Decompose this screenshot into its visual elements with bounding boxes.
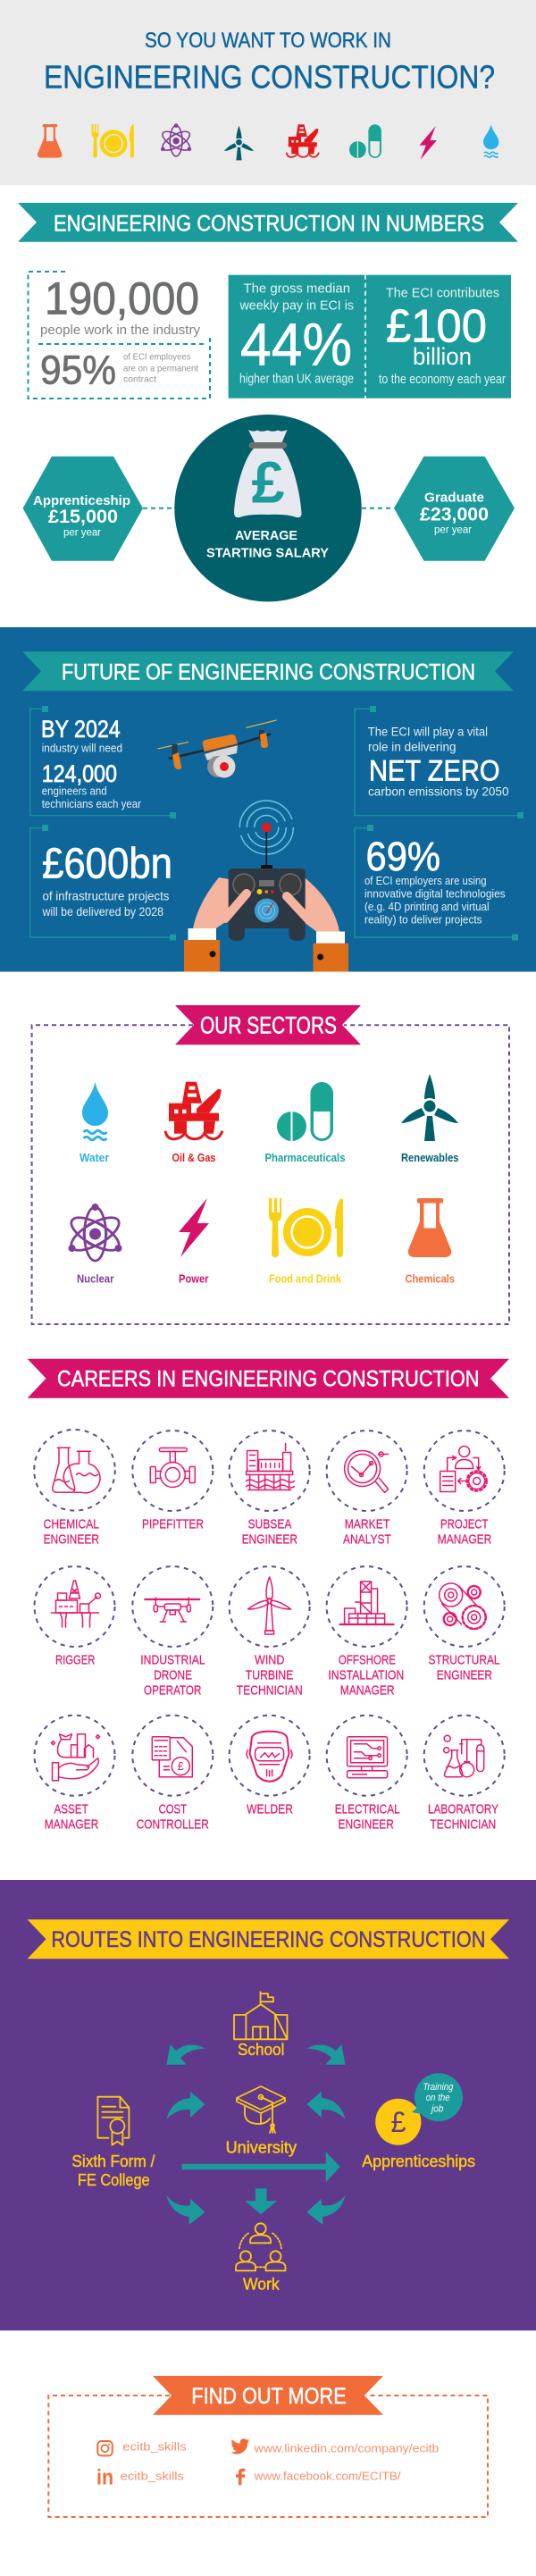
career: offshore installation manager: MANAGER xyxy=(340,1683,395,1699)
hexagon: graduate salary: per year xyxy=(434,525,472,536)
pay text: weekly pay in ECI is xyxy=(239,298,354,314)
sector: pharmaceuticals xyxy=(264,1082,346,1164)
sector: oil and gas xyxy=(165,1082,222,1164)
apprenticeships label: Apprenticeships xyxy=(362,2152,475,2170)
banner: routes heading xyxy=(28,1919,509,1959)
pay text: higher than UK average xyxy=(239,372,354,387)
icon: oil rig xyxy=(287,124,319,157)
bubble: training on the job: job xyxy=(430,2103,443,2114)
icon: nuclear atom xyxy=(160,123,192,156)
text: by 2024: technicians each year xyxy=(42,797,142,810)
sector: nuclear xyxy=(67,1204,123,1286)
hexagon: apprenticeship salary: £15,000 xyxy=(48,507,118,527)
salary label xyxy=(206,528,329,561)
teal stat panel xyxy=(229,275,511,399)
route: sixth form: Sixth Form / xyxy=(71,2152,155,2170)
route: school xyxy=(234,1992,288,2059)
career: industrial drone operator: DRONE xyxy=(154,1668,192,1683)
text: £600bn: of infrastructure projects xyxy=(43,888,169,902)
stat: 190,000: 190,000 xyxy=(45,273,199,324)
arrow: school to apprenticeships xyxy=(306,2044,346,2065)
hexagon: apprenticeship salary: per year xyxy=(63,527,101,538)
career: wind turbine technician: WIND xyxy=(255,1653,285,1668)
salary connectors xyxy=(143,508,394,509)
sector: renewables xyxy=(401,1074,459,1164)
icon: money bag: £ xyxy=(252,449,285,515)
career: wind turbine technician: TECHNICIAN xyxy=(237,1683,303,1699)
panel: future of engineering construction xyxy=(0,627,536,972)
dashed stat box xyxy=(29,272,210,399)
illustration: drone xyxy=(157,720,277,777)
circle: average starting salary xyxy=(174,415,362,601)
illustration: hands and remote controller xyxy=(184,823,348,972)
arrows xyxy=(166,2044,346,2225)
icon: water drop xyxy=(483,124,498,157)
title line 1: SO YOU WANT TO WORK IN xyxy=(145,29,391,53)
economy text xyxy=(379,286,506,387)
text: by 2024: BY 2024 xyxy=(41,716,121,743)
route: work xyxy=(236,2223,286,2294)
box lines xyxy=(30,706,523,940)
panel: find out more xyxy=(48,2376,488,2517)
career: subsea engineer xyxy=(230,1431,310,1548)
panel: careers in engineering construction xyxy=(28,1359,509,1832)
hexagon: apprenticeship salary xyxy=(23,457,143,561)
career: pipefitter xyxy=(132,1431,213,1532)
sector: pharmaceuticals: Pharmaceuticals xyxy=(264,1152,346,1164)
career: chemical engineer: CHEMICAL xyxy=(44,1517,99,1532)
route: school: School xyxy=(238,2041,284,2059)
career: cost controller: CONTROLLER xyxy=(137,1817,209,1832)
career: laboratory technician: TECHNICIAN xyxy=(430,1817,496,1832)
text: 69%: reality) to deliver projects xyxy=(364,912,482,926)
economy text: The ECI contributes xyxy=(386,286,499,301)
text: 69%: 69% xyxy=(366,834,440,879)
stat caption: permanent contract xyxy=(123,352,198,384)
route: sixth form xyxy=(71,2097,155,2189)
career: cost controller xyxy=(132,1716,213,1832)
contact: linkedin handle xyxy=(96,2466,184,2490)
text: by 2024: 124,000 xyxy=(42,760,117,787)
sector: renewables: Renewables xyxy=(401,1152,459,1164)
career: offshore installation manager: OFFSHORE xyxy=(339,1653,396,1668)
arrow: sixth form to university xyxy=(166,2092,205,2119)
career: welder xyxy=(230,1716,310,1817)
arrow: sixth form to apprenticeships xyxy=(182,2152,340,2182)
icon: pharmaceuticals xyxy=(349,124,381,158)
career: laboratory technician: LABORATORY xyxy=(428,1801,498,1817)
contact: facebook: www.facebook.com/ECITB/ xyxy=(254,2469,401,2482)
career: chemical engineer xyxy=(34,1430,115,1548)
pay text xyxy=(239,281,354,387)
sector: chemicals: Chemicals xyxy=(406,1273,455,1286)
banner: careers heading xyxy=(28,1359,509,1398)
text: net zero xyxy=(368,724,509,799)
text: 69%: (e.g. 4D printing and virtual xyxy=(364,900,490,913)
career: subsea engineer: SUBSEA xyxy=(248,1517,291,1532)
arrow: apprenticeships to university xyxy=(306,2092,346,2119)
arrow: sixth form to work xyxy=(166,2195,205,2225)
career: project manager xyxy=(424,1431,505,1548)
icon: wind turbine xyxy=(224,126,254,160)
dashed contact frame xyxy=(48,2396,488,2517)
text: net zero: The ECI will play a vital xyxy=(368,724,488,738)
career: cost controller: £ xyxy=(178,1759,185,1773)
career: asset manager xyxy=(34,1716,114,1832)
contact: twitter xyxy=(230,2438,439,2454)
career: wind turbine technician: TURBINE xyxy=(246,1668,293,1683)
icon: money bag xyxy=(234,430,302,517)
career: chemical engineer: ENGINEER xyxy=(44,1532,99,1548)
career: wind turbine technician xyxy=(230,1566,310,1699)
career: structural engineer: ENGINEER xyxy=(437,1668,492,1683)
text: 69% xyxy=(364,834,506,926)
career: offshore installation manager xyxy=(327,1566,407,1699)
career: structural engineer xyxy=(424,1566,505,1683)
icon: pound coin: £ xyxy=(391,2106,406,2138)
text: by 2024 xyxy=(41,716,142,810)
career: rigger xyxy=(34,1566,114,1668)
career: electrical engineer xyxy=(327,1716,407,1832)
banner: future heading xyxy=(22,651,514,691)
career: market analyst: ANALYST xyxy=(343,1532,391,1548)
sector: chemicals xyxy=(406,1198,455,1286)
contact: linkedin handle: in xyxy=(96,2466,113,2490)
career: subsea engineer: ENGINEER xyxy=(242,1532,297,1548)
route: sixth form: FE College xyxy=(78,2171,150,2189)
banner: find out more xyxy=(153,2376,383,2415)
sector: power: Power xyxy=(179,1273,209,1286)
illustration: signal rings xyxy=(239,801,293,854)
text: £600bn: will be delivered by 2028 xyxy=(42,904,163,919)
career: market analyst xyxy=(327,1431,407,1548)
career: pipefitter: PIPEFITTER xyxy=(142,1517,204,1532)
pay text: The gross median xyxy=(243,281,350,297)
bubble: training on the job: Training xyxy=(423,2082,454,2093)
hexagon: graduate salary: Graduate xyxy=(424,491,484,506)
text: net zero: NET ZERO xyxy=(369,754,500,786)
arrow: university to work xyxy=(245,2188,277,2214)
banner: numbers heading: ENGINEERING CONSTRUCTION IN NUMBERS xyxy=(54,211,484,236)
career: structural engineer: STRUCTURAL xyxy=(429,1653,500,1668)
hexagon: graduate salary: £23,000 xyxy=(420,504,489,524)
contact: instagram xyxy=(97,2440,187,2455)
text: 69%: of ECI employers are using xyxy=(364,874,487,887)
contact: instagram: ecitb_skills xyxy=(122,2440,187,2454)
hexagon: graduate salary xyxy=(394,457,515,561)
banner: our sectors xyxy=(175,1005,361,1045)
text: by 2024: industry will need xyxy=(42,741,122,754)
bubble: training on the job xyxy=(412,2073,463,2121)
sector: power xyxy=(179,1198,209,1286)
career: offshore installation manager: INSTALLATION xyxy=(328,1668,404,1683)
icon: chemicals flask xyxy=(38,124,62,158)
career: electrical engineer: ELECTRICAL xyxy=(335,1801,400,1817)
contact: facebook xyxy=(236,2469,401,2485)
text: 69%: innovative digital technologies xyxy=(364,886,506,900)
contact: linkedin handle: ecitb_skills xyxy=(121,2469,184,2482)
pay text: 44% xyxy=(240,311,352,378)
economy text: billion xyxy=(413,343,472,370)
bubble: training on the job: on the xyxy=(426,2093,450,2103)
career: industrial drone operator xyxy=(132,1566,213,1699)
text: net zero: carbon emissions by 2050 xyxy=(368,785,509,799)
career: market analyst: MARKET xyxy=(345,1517,389,1532)
banner: find out more: FIND OUT MORE xyxy=(191,2384,347,2409)
career: project manager: MANAGER xyxy=(438,1532,491,1548)
icon: power bolt xyxy=(420,126,437,160)
banner: careers heading: CAREERS IN ENGINEERING CONSTRUCTION xyxy=(57,1367,479,1392)
salary label: STARTING SALARY xyxy=(206,546,329,561)
career: rigger: RIGGER xyxy=(55,1653,96,1668)
career: industrial drone operator: INDUSTRIAL xyxy=(140,1653,205,1668)
route: work: Work xyxy=(243,2276,281,2294)
stat caption: permanent contract: of ECI employees xyxy=(123,352,191,363)
panel: engineering construction in numbers xyxy=(18,203,518,601)
career: asset manager: MANAGER xyxy=(45,1817,98,1832)
banner: our sectors: OUR SECTORS xyxy=(200,1012,337,1039)
panel: header xyxy=(0,0,536,185)
text: £600bn xyxy=(42,841,172,919)
panel: routes into engineering construction xyxy=(0,1880,536,2330)
hexagon: apprenticeship salary: Apprenticeship xyxy=(33,493,130,508)
career: industrial drone operator: OPERATOR xyxy=(144,1683,202,1699)
banner: numbers heading xyxy=(18,203,518,242)
career: project manager: PROJECT xyxy=(440,1517,488,1532)
stat: 95%: 95% xyxy=(40,347,116,392)
career: laboratory technician xyxy=(424,1716,505,1832)
text: net zero: role in delivering xyxy=(368,740,456,754)
economy text: £100 xyxy=(386,301,487,353)
sector: food and drink xyxy=(269,1198,343,1286)
contact: twitter: www.linkedin.com/company/ecitb xyxy=(254,2441,439,2454)
arrow: apprenticeships to work xyxy=(306,2195,346,2225)
sector: food and drink: Food and Drink xyxy=(269,1273,341,1286)
career: electrical engineer: ENGINEER xyxy=(338,1817,394,1832)
arrow: school to sixth form xyxy=(166,2044,205,2065)
stat caption: permanent contract: are on a permanent xyxy=(123,363,198,373)
text: by 2024: engineers and xyxy=(42,784,107,797)
sector: water: Water xyxy=(80,1152,109,1164)
route: university xyxy=(226,2086,297,2156)
icon: food plate xyxy=(92,124,134,158)
banner: future heading: FUTURE OF ENGINEERING CONSTRUCTION xyxy=(62,660,475,685)
route: apprenticeships xyxy=(362,2073,475,2170)
stat caption: people: people work in the industry xyxy=(40,323,200,338)
career: welder: WELDER xyxy=(247,1801,293,1817)
text: £600bn: £600bn xyxy=(42,841,172,888)
dashed sectors frame xyxy=(32,1025,509,1324)
sector: nuclear: Nuclear xyxy=(77,1273,114,1286)
economy text: to the economy each year xyxy=(379,372,506,387)
career: cost controller: COST xyxy=(159,1801,187,1817)
sector: water xyxy=(80,1082,109,1164)
career: asset manager: ASSET xyxy=(54,1801,88,1817)
panel: our sectors xyxy=(32,1005,509,1324)
sector: oil and gas: Oil & Gas xyxy=(172,1152,216,1164)
salary label: AVERAGE xyxy=(235,528,297,543)
stat caption: permanent contract: contract xyxy=(123,373,156,384)
route: university: University xyxy=(226,2138,297,2156)
